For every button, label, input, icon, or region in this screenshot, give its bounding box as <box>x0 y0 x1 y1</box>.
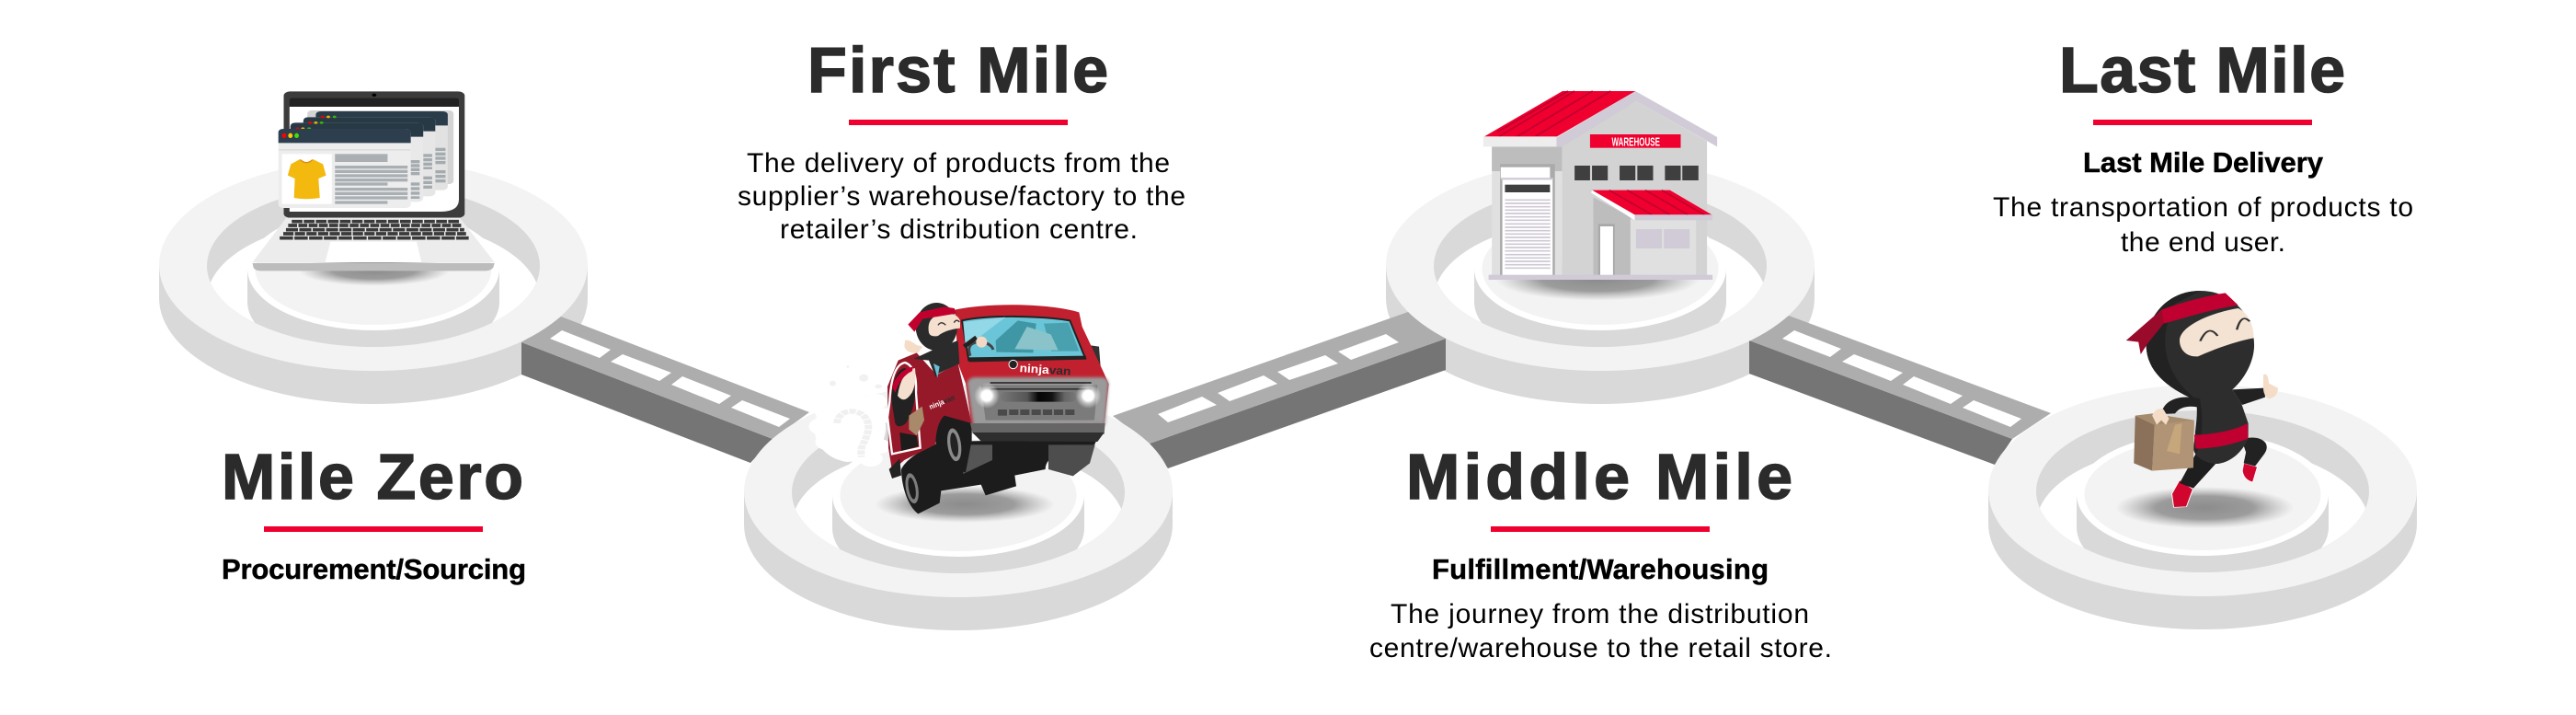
heading block: First Mile <box>738 34 1185 245</box>
belt <box>2194 423 2249 449</box>
disc top: mile zero <box>159 159 588 380</box>
van shadow <box>875 486 1055 523</box>
road: mile zero to first mile <box>521 317 809 463</box>
heading block: Mile Zero: Procurement/Sourcing <box>222 553 526 585</box>
heading block: Mile Zero: Mile Zero <box>222 441 523 513</box>
icon: warehouse building <box>1483 91 1717 301</box>
heading block: First Mile: First Mile <box>807 34 1108 106</box>
road: middle mile to last mile <box>1749 316 2051 465</box>
road: first mile to middle mile <box>1113 312 1446 468</box>
heading block: Last Mile: the end user. <box>2121 227 2285 258</box>
heading block: First Mile: retailer’s distribution centre. <box>780 214 1138 245</box>
back leg and shoe <box>2242 463 2258 482</box>
heading block: Middle Mile: The journey from the distribution <box>1391 599 1809 629</box>
icon: ninja van delivery vehicle <box>809 303 1109 523</box>
left arm <box>2161 397 2200 414</box>
heading block: Last Mile <box>1993 34 2413 258</box>
front logo text: ninjavan <box>1019 362 1071 378</box>
heading block: First Mile: The delivery of products from the <box>747 148 1170 179</box>
heading block: Last Mile: Last Mile <box>2059 34 2345 106</box>
front leg and shoe <box>2172 480 2192 507</box>
right arm and thumbs up <box>2232 388 2265 405</box>
heading block: Last Mile: Last Mile Delivery <box>2083 146 2324 179</box>
heading block: Middle Mile: Fulfillment/Warehousing <box>1432 553 1769 585</box>
parcel <box>2152 419 2194 471</box>
heading block: Middle Mile <box>1369 441 1832 663</box>
heading block: Last Mile: The transportation of products to <box>1993 192 2413 223</box>
ninja decal on van side <box>887 363 921 454</box>
disc top: middle mile <box>1386 173 1815 371</box>
ninja leaning out of the window <box>913 340 959 377</box>
disc bases: extruded sides <box>159 265 2417 630</box>
heading block: First Mile: supplier’s warehouse/factory to the <box>738 181 1185 212</box>
smoke puffs <box>809 365 896 467</box>
warehouse sign <box>1590 134 1680 149</box>
heading block: Middle Mile: Middle Mile <box>1406 441 1792 513</box>
icon: laptop with browser windows <box>253 91 495 286</box>
warehouse sign: WAREHOUSE <box>1611 135 1660 149</box>
heading block: Middle Mile: centre/warehouse to the retail store. <box>1369 633 1832 663</box>
body and head <box>2147 291 2254 464</box>
heading block: Mile Zero <box>222 441 526 585</box>
disc top: first mile <box>744 386 1173 606</box>
icon: running ninja courier with parcel <box>2115 291 2294 528</box>
side logo text: ninjavan <box>928 393 956 411</box>
disc top: last mile <box>1988 385 2417 605</box>
van body <box>887 303 1109 513</box>
